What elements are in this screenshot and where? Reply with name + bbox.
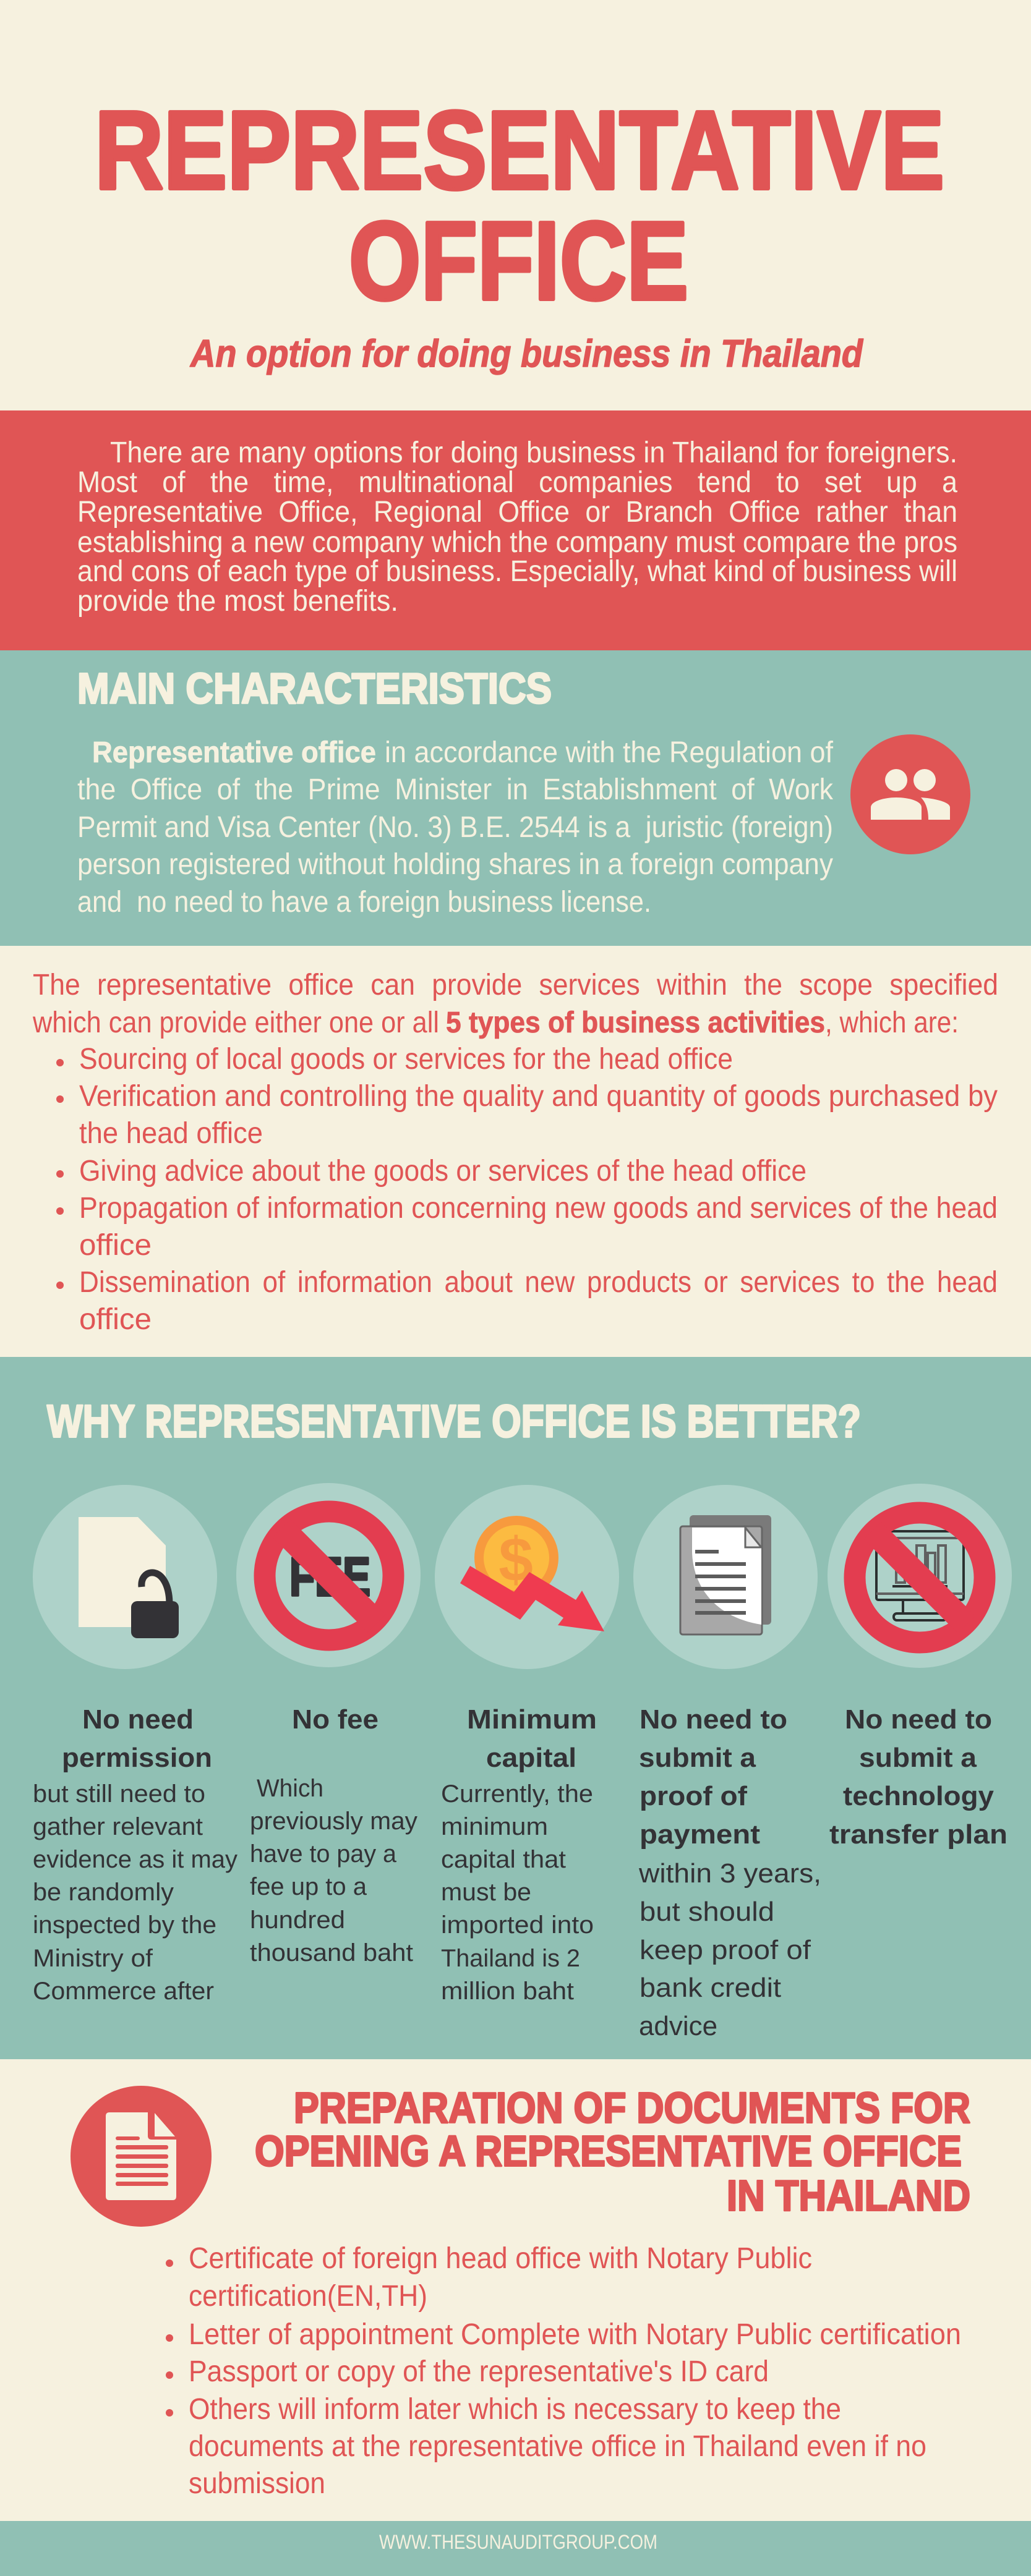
intro paragraph: Representative Office, Regional Office or Branch Office rather than bbox=[77, 496, 957, 529]
services introduction: which can provide either one or all bbox=[32, 1006, 439, 1039]
column: minimum capital: million baht bbox=[441, 1978, 574, 2005]
column: minimum capital: Minimum bbox=[467, 1704, 597, 1735]
column: no need permission: evidence as it may bbox=[33, 1846, 237, 1873]
intro paragraph: provide the most benefits. bbox=[77, 585, 398, 618]
column: no technology transfer plan: No need to bbox=[845, 1704, 992, 1735]
column: no need permission: be randomly bbox=[33, 1879, 174, 1906]
list: business activities: Giving advice about the goods or services of the head office bbox=[79, 1155, 806, 1188]
column: no proof of payment: bank credit bbox=[640, 1973, 781, 2003]
list: required documents: Others will inform later which is necessary to keep the bbox=[189, 2393, 841, 2426]
footer website: WWW.THESUNAUDITGROUP.COM bbox=[379, 2531, 657, 2553]
title: OFFICE bbox=[349, 199, 688, 323]
characteristics paragraph: and no need to have a foreign business license. bbox=[77, 886, 651, 919]
intro paragraph: and cons of each type of business. Especially, what kind of business will bbox=[77, 555, 957, 588]
panel: services bbox=[0, 946, 1031, 1357]
panel: title header bbox=[0, 0, 1031, 410]
column: no proof of payment bbox=[638, 1704, 821, 2041]
column: no proof of payment: submit a bbox=[639, 1743, 756, 1773]
characteristics paragraph: the Office of the Prime Minister in Establishment of Work bbox=[77, 773, 834, 806]
panel: introduction bbox=[0, 410, 1031, 650]
subtitle: An option for doing business in Thailand bbox=[189, 333, 863, 375]
column: no need permission: Commerce after bbox=[33, 1978, 214, 2005]
list: business activities: Verification and controlling the quality and quantity of goods purchased by bbox=[79, 1080, 998, 1113]
heading: main characteristics: MAIN CHARACTERISTICS bbox=[77, 664, 552, 712]
intro paragraph bbox=[77, 436, 957, 618]
column: no technology transfer plan bbox=[829, 1704, 1007, 1850]
column: no need permission: gather relevant bbox=[33, 1813, 203, 1840]
list: required documents: documents at the representative office in Thailand even if no bbox=[189, 2430, 926, 2463]
column: no need permission: No need bbox=[82, 1704, 194, 1735]
column: minimum capital: imported into bbox=[441, 1911, 594, 1939]
column: no need permission bbox=[33, 1704, 237, 2005]
column: minimum capital: capital bbox=[486, 1743, 576, 1773]
column: no fee: Which bbox=[257, 1775, 323, 1802]
list: business activities: the head office bbox=[79, 1117, 263, 1150]
icon: people bbox=[850, 734, 970, 854]
panel: preparation of documents bbox=[0, 2059, 1031, 2521]
services introduction bbox=[32, 969, 998, 1039]
column: no fee: No fee bbox=[292, 1704, 379, 1735]
title bbox=[95, 88, 944, 323]
icon: no fee: FEE bbox=[289, 1546, 370, 1607]
icon: document stack bbox=[633, 1485, 818, 1669]
list: required documents: submission bbox=[189, 2467, 325, 2500]
list: required documents: Passport or copy of the representative's ID card bbox=[189, 2355, 769, 2388]
column: no technology transfer plan: submit a bbox=[859, 1743, 977, 1773]
intro paragraph: establishing a new company which the company must compare the pros bbox=[77, 526, 957, 559]
column: no fee: thousand baht bbox=[250, 1939, 413, 1966]
column: minimum capital: must be bbox=[441, 1879, 531, 1906]
column: no fee: have to pay a bbox=[250, 1840, 397, 1868]
column: minimum capital: Currently, the bbox=[441, 1780, 593, 1808]
list: required documents bbox=[166, 2242, 961, 2500]
characteristics paragraph bbox=[77, 736, 834, 919]
panel: footer bbox=[0, 2521, 1031, 2576]
intro paragraph: There are many options for doing business in Thailand for foreigners. bbox=[110, 436, 957, 469]
column: no fee: fee up to a bbox=[250, 1873, 367, 1900]
services introduction: , which are: bbox=[825, 1006, 959, 1039]
column: minimum capital: capital that bbox=[441, 1846, 566, 1873]
column: no fee bbox=[250, 1704, 417, 1966]
services introduction: 5 types of business activities bbox=[446, 1006, 825, 1039]
list: business activities bbox=[56, 1043, 998, 1336]
list: required documents: certification(EN,TH) bbox=[189, 2280, 427, 2313]
panel: main characteristics bbox=[0, 650, 1031, 946]
characteristics paragraph: Representative office bbox=[92, 736, 376, 769]
heading: preparation of documents bbox=[255, 2083, 970, 2219]
list: business activities: office bbox=[79, 1303, 152, 1336]
icon: no technology bbox=[828, 1484, 1012, 1668]
heading: preparation of documents: IN THAILAND bbox=[727, 2171, 970, 2219]
column: no proof of payment: proof of bbox=[640, 1781, 747, 1811]
list: required documents: Certificate of foreign head office with Notary Public bbox=[189, 2242, 812, 2275]
column: no proof of payment: keep proof of bbox=[640, 1935, 811, 1965]
column: no fee: hundred bbox=[250, 1906, 345, 1934]
column: no proof of payment: advice bbox=[639, 2011, 717, 2041]
characteristics paragraph: in accordance with the Regulation of bbox=[385, 736, 834, 769]
list: required documents: Letter of appointment Complete with Notary Public certification bbox=[189, 2318, 961, 2351]
column: no fee: previously may bbox=[250, 1808, 417, 1835]
column: no proof of payment: No need to bbox=[640, 1704, 787, 1735]
column: no technology transfer plan: technology bbox=[843, 1781, 995, 1811]
column: no technology transfer plan: transfer plan bbox=[829, 1819, 1007, 1850]
icon: document bbox=[71, 2086, 212, 2227]
column: no need permission: Ministry of bbox=[33, 1945, 153, 1972]
panel: why representative office is better bbox=[0, 1357, 1031, 2059]
column: minimum capital: minimum bbox=[441, 1813, 548, 1840]
column: no need permission: permission bbox=[62, 1743, 212, 1773]
heading: why better: WHY REPRESENTATIVE OFFICE IS BETTER? bbox=[47, 1396, 861, 1447]
list: business activities: office bbox=[79, 1229, 152, 1262]
list: business activities: Sourcing of local goods or services for the head office bbox=[79, 1043, 733, 1076]
intro paragraph: Most of the time, multinational companies tend to set up a bbox=[77, 466, 957, 499]
column: minimum capital: Thailand is 2 bbox=[441, 1945, 580, 1972]
column: no need permission: inspected by the bbox=[33, 1911, 216, 1939]
icon: no fee bbox=[236, 1483, 421, 1667]
characteristics paragraph: Permit and Visa Center (No. 3) B.E. 2544 is a juristic (foreign) bbox=[77, 811, 833, 844]
icon: falling coin bbox=[435, 1485, 619, 1669]
column: minimum capital bbox=[441, 1704, 597, 2005]
icon: document with open lock bbox=[33, 1485, 217, 1669]
column: no proof of payment: payment bbox=[640, 1819, 760, 1850]
column: no need permission: but still need to bbox=[33, 1780, 205, 1808]
characteristics paragraph: person registered without holding shares in a foreign company bbox=[77, 848, 833, 881]
icon: falling coin: $ bbox=[498, 1525, 533, 1594]
column: no proof of payment: but should bbox=[640, 1897, 774, 1927]
column: no proof of payment: within 3 years, bbox=[638, 1858, 821, 1889]
